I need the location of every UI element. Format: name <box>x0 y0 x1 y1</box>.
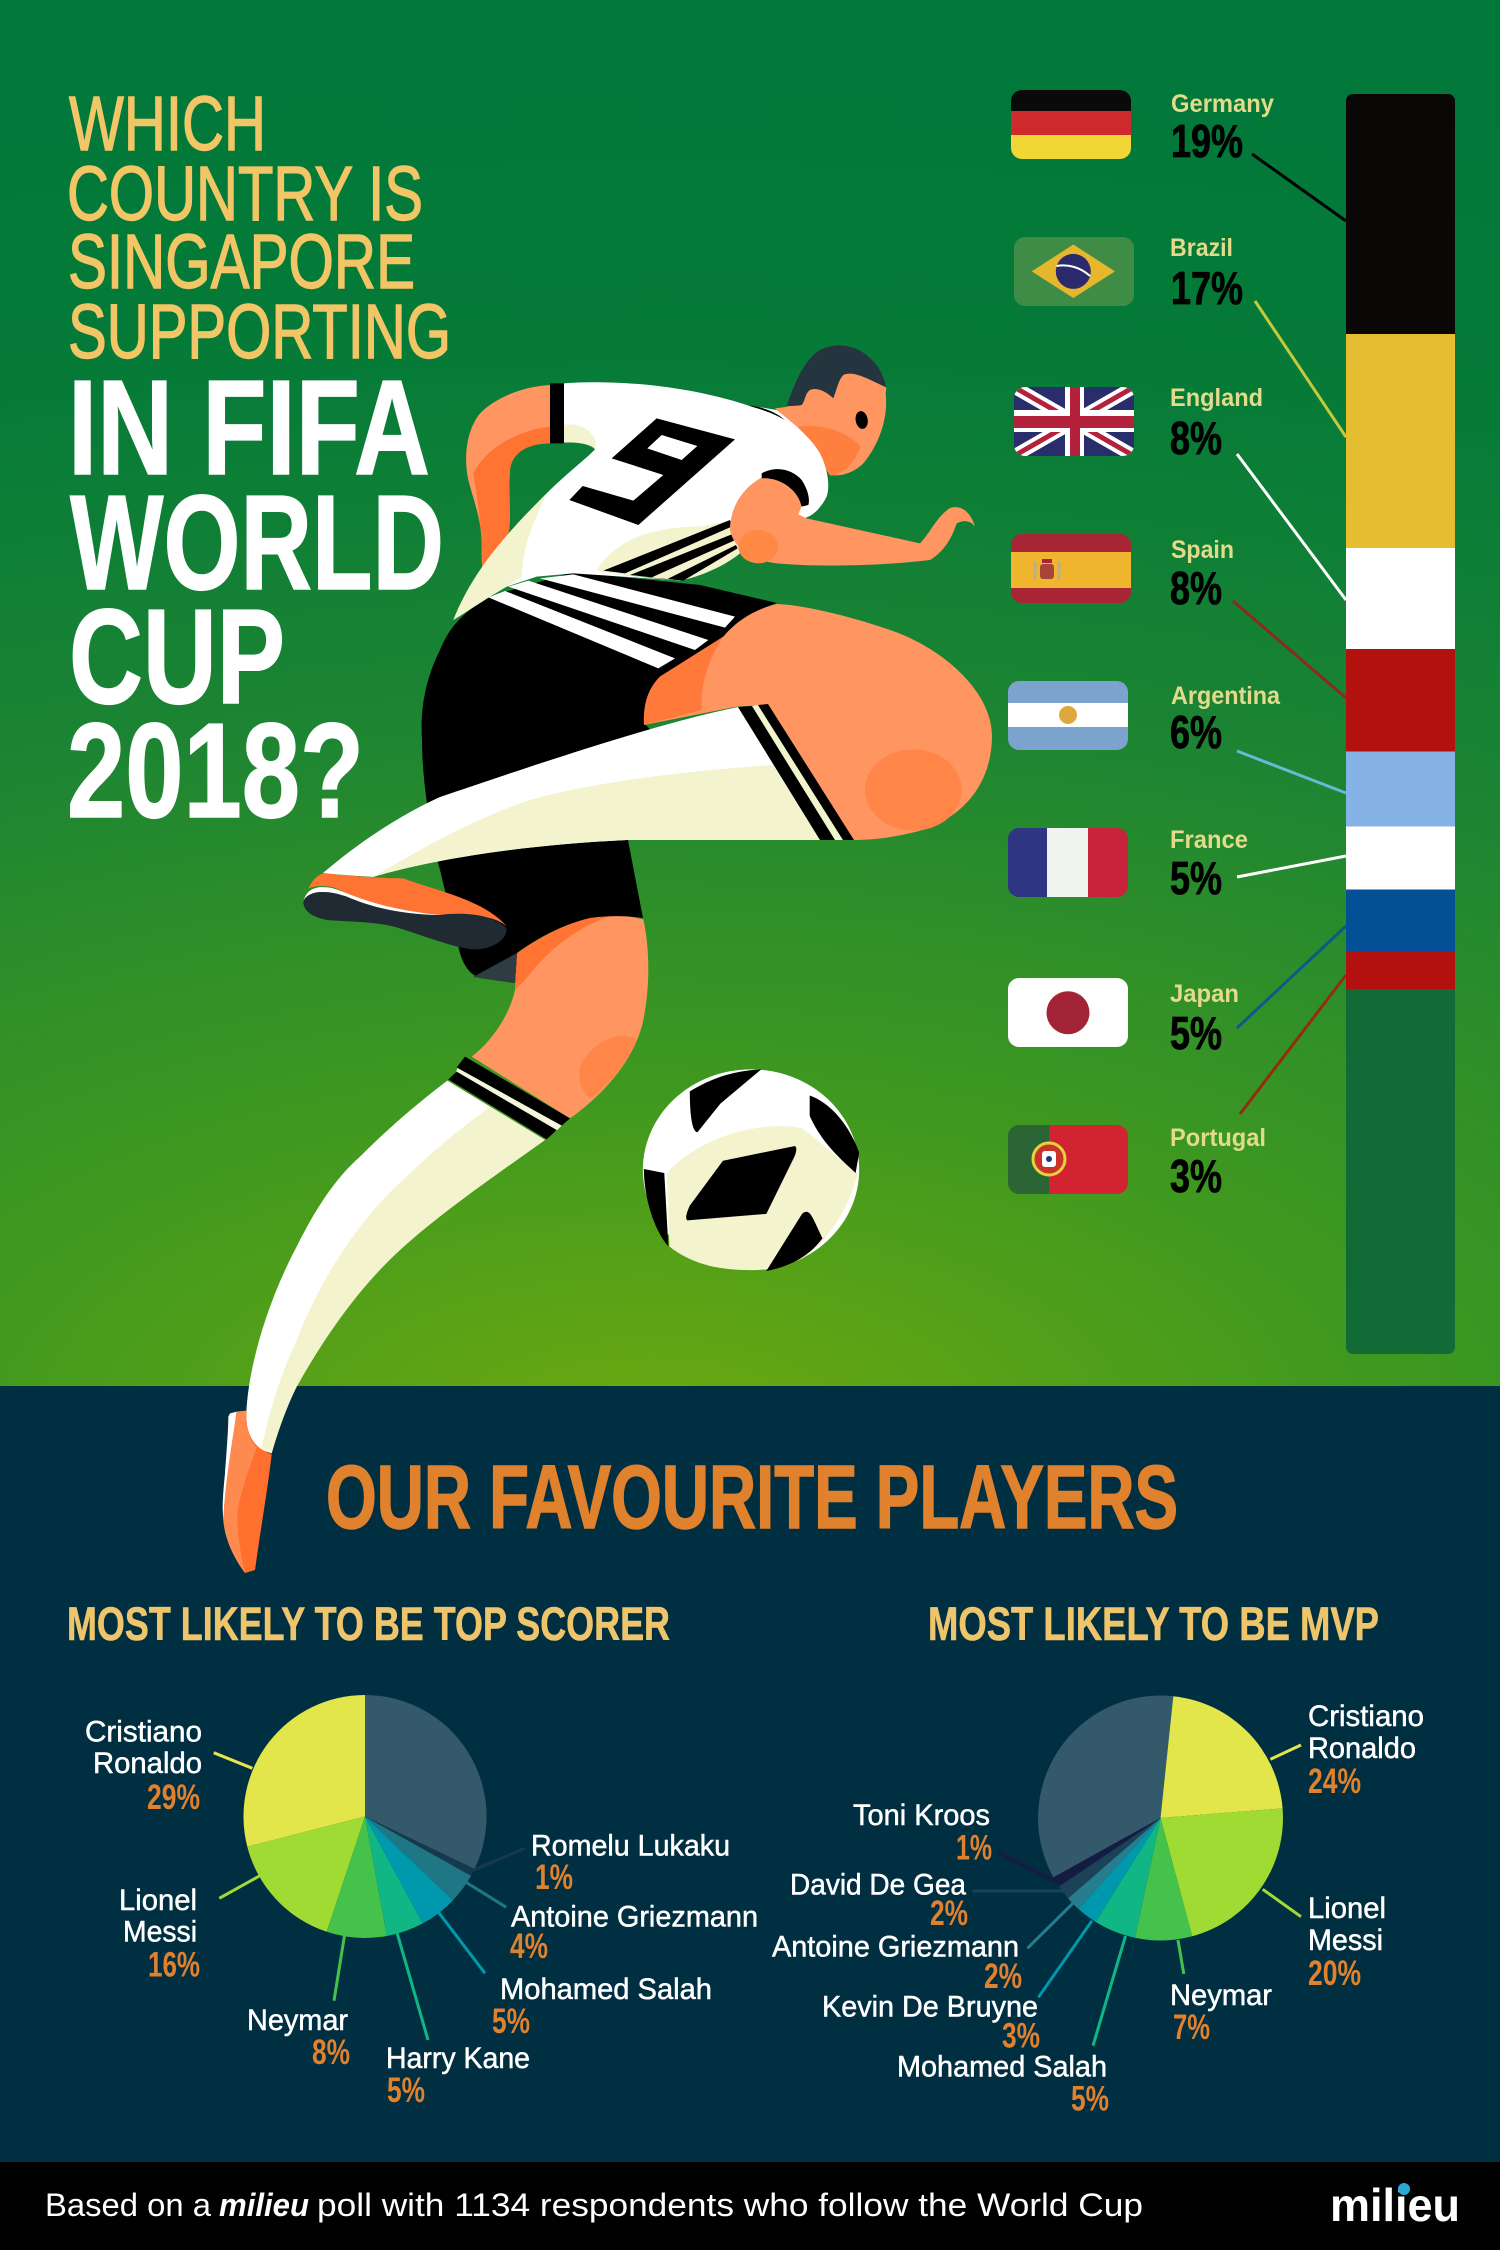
top scorer labels: Romelu Lukaku <box>531 1830 730 1863</box>
footer note: milieu <box>219 2187 309 2223</box>
country labels: 8% <box>1170 412 1222 464</box>
subheading: MVP: MOST LIKELY TO BE MVP <box>928 1598 1379 1651</box>
rear arm <box>466 385 550 568</box>
country labels: Brazil <box>1170 234 1233 262</box>
subheading: top scorer: MOST LIKELY TO BE TOP SCORER <box>67 1598 670 1651</box>
flag: Portugal <box>1008 1125 1128 1194</box>
MVP labels: Antoine Griezmann <box>772 1931 1019 1964</box>
top scorer labels: Lionel <box>119 1884 197 1917</box>
MVP labels: Toni Kroos <box>853 1799 990 1832</box>
MVP labels: Lionel <box>1308 1892 1386 1925</box>
footer bar <box>0 2162 1500 2250</box>
shorts stripes <box>488 574 735 668</box>
flag: Argentina <box>1008 681 1128 750</box>
heading: our favourite players: OUR FAVOURITE PLAYERS <box>326 1448 1178 1548</box>
MVP labels: Mohamed Salah <box>897 2051 1107 2084</box>
shorts <box>422 572 777 983</box>
top scorer labels: 4% <box>510 1927 548 1966</box>
logo: milieu: milieu <box>1330 2179 1460 2231</box>
country labels: Argentina <box>1171 682 1281 710</box>
pie chart: MVP <box>1038 1696 1283 1940</box>
top scorer labels: 29% <box>147 1778 200 1817</box>
top scorer labels: Antoine Griezmann <box>511 1901 758 1934</box>
top scorer labels: 5% <box>387 2071 425 2110</box>
MVP labels: 3% <box>1002 2017 1040 2056</box>
top scorer labels: Neymar <box>247 2004 348 2037</box>
front leg thigh <box>644 604 992 840</box>
illustration: footballer <box>223 345 992 1573</box>
top scorer leader lines <box>214 1753 525 2040</box>
front leg sock <box>323 704 854 877</box>
footer note <box>45 2187 1143 2223</box>
top scorer labels: Cristiano <box>85 1716 202 1749</box>
country labels: Spain <box>1171 536 1234 564</box>
country labels <box>1170 90 1281 1202</box>
title: CUP <box>69 581 285 732</box>
title: SUPPORTING <box>68 289 451 375</box>
back leg thigh <box>472 914 648 1118</box>
back leg sock <box>246 1057 570 1453</box>
country labels: 3% <box>1170 1150 1222 1202</box>
country labels: 19% <box>1171 115 1243 167</box>
country labels: 5% <box>1170 852 1222 904</box>
top scorer labels: 1% <box>535 1858 573 1897</box>
MVP labels: 20% <box>1308 1954 1361 1993</box>
navy players panel <box>0 1386 1500 2162</box>
country labels: 5% <box>1170 1007 1222 1059</box>
flag: France <box>1008 828 1128 897</box>
jersey with number 9 <box>453 382 828 620</box>
MVP labels: Cristiano <box>1308 1700 1424 1733</box>
head <box>775 345 886 476</box>
front boot <box>303 873 508 949</box>
back foot shoe <box>223 1411 272 1573</box>
title: 2018? <box>67 695 364 846</box>
MVP labels: David De Gea <box>790 1868 966 1901</box>
stacked bar chart <box>1346 94 1455 1354</box>
footer note: poll with 1134 respondents who follow the World Cup <box>317 2187 1143 2223</box>
top scorer labels: Harry Kane <box>386 2042 530 2075</box>
country labels: 8% <box>1170 562 1222 614</box>
flag: Japan <box>1008 978 1128 1047</box>
top scorer labels <box>85 1716 758 2110</box>
MVP labels: 2% <box>930 1894 968 1933</box>
title: WHICH <box>69 81 266 167</box>
MVP labels: 1% <box>956 1828 992 1867</box>
connector lines <box>1233 154 1346 1114</box>
country labels: 17% <box>1171 262 1243 314</box>
title: WORLD <box>70 467 444 618</box>
MVP labels: Neymar <box>1170 1979 1272 2012</box>
country labels: Portugal <box>1170 1124 1266 1152</box>
MVP labels: 7% <box>1173 2008 1210 2047</box>
footer note: Based on a <box>45 2187 211 2223</box>
title: SINGAPORE <box>68 219 415 305</box>
flag: England / UK <box>1014 387 1134 456</box>
pie chart: top scorer <box>243 1695 487 1938</box>
country labels: Germany <box>1171 90 1274 118</box>
MVP labels: 2% <box>984 1957 1022 1996</box>
top scorer labels: Ronaldo <box>93 1747 202 1780</box>
green pitch background <box>0 0 1500 1387</box>
country labels: France <box>1170 826 1248 854</box>
MVP labels <box>772 1700 1424 2119</box>
MVP labels: 5% <box>1071 2080 1109 2119</box>
MVP labels: Messi <box>1308 1924 1383 1957</box>
MVP labels: Ronaldo <box>1308 1732 1416 1765</box>
MVP leader lines <box>972 1745 1301 2046</box>
top scorer labels: 5% <box>492 2002 530 2041</box>
country labels: England <box>1170 384 1263 412</box>
football <box>643 1069 859 1271</box>
flag: Brazil <box>1014 237 1134 306</box>
top scorer labels: Mohamed Salah <box>500 1973 712 2006</box>
top scorer labels: 16% <box>148 1946 200 1985</box>
MVP labels: 24% <box>1308 1762 1361 1801</box>
country labels: Japan <box>1170 980 1239 1008</box>
title: COUNTRY IS <box>67 151 423 237</box>
front arm <box>730 469 975 566</box>
top scorer labels: Messi <box>123 1916 197 1949</box>
title: IN FIFA <box>68 352 430 503</box>
country labels: 6% <box>1170 706 1222 758</box>
title <box>67 81 451 846</box>
MVP labels: Kevin De Bruyne <box>822 1991 1038 2024</box>
flag: Germany <box>1011 90 1131 159</box>
flag: Spain <box>1011 534 1131 603</box>
top scorer labels: 8% <box>312 2033 350 2072</box>
